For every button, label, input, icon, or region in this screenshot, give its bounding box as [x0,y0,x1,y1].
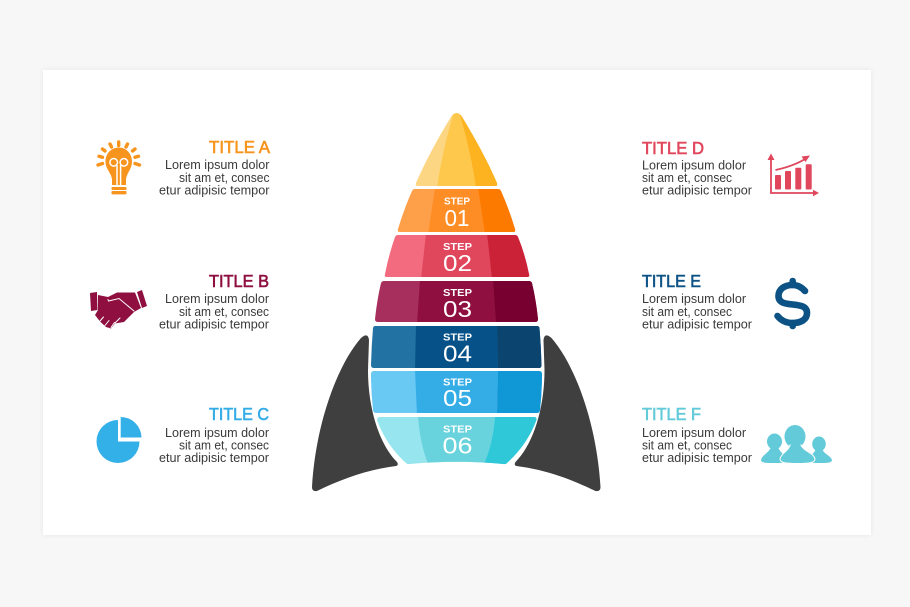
segment: step 04: STEP [443,332,472,344]
block: title D [642,138,753,198]
text: title A body [159,157,270,198]
text: title C body [159,425,270,465]
text: title F body: etur adipisic tempor [642,450,753,465]
block: title B [159,271,270,332]
text: title E body: etur adipisic tempor [642,316,753,332]
segment: step 05: 05 [443,385,472,411]
heading: title F: TITLE F [642,404,701,424]
text: title E body: Lorem ipsum dolor [642,291,747,306]
text: title E body: sit am et, consec [642,304,732,319]
icon: handshake [90,290,147,328]
nose cone [416,113,498,186]
block: title E [642,271,753,332]
left fin [312,335,398,491]
text: title B body: Lorem ipsum dolor [165,291,270,306]
text: title B body: sit am et, consec [179,304,269,319]
block: title C [159,404,270,465]
text: title E body [642,291,753,332]
heading: title C: TITLE C [209,404,269,424]
text: title F body: Lorem ipsum dolor [642,425,747,440]
segment: step 02: 02 [443,250,472,276]
text: title A body: Lorem ipsum dolor [165,157,270,172]
text: title D body: Lorem ipsum dolor [642,158,747,172]
heading: title A: TITLE A [209,137,270,157]
heading: title B: TITLE B [209,271,269,291]
segment: step 01: STEP [444,196,470,208]
text: title B body: etur adipisic tempor [159,316,270,332]
segment: step 02: STEP [443,242,472,253]
block: title A [159,137,270,198]
segment: step 05 [368,370,544,415]
segment: step 06: STEP [443,424,472,436]
text: title D body [642,158,753,198]
text: title A body: etur adipisic tempor [159,182,270,198]
segment: step 04: 04 [443,340,472,366]
text: title F body [642,425,753,465]
segment: step 03: STEP [443,288,472,299]
right fin [515,335,600,491]
block: title F [642,404,753,465]
segment: step 02 [382,234,532,279]
heading: title D: TITLE D [642,138,704,158]
text: title C body: etur adipisic tempor [159,450,270,465]
icon: light bulb [98,142,140,194]
segment: step 06 [375,416,540,466]
icon: bar chart with arrow [768,154,819,196]
text: title A body: sit am et, consec [179,170,270,185]
segment: step 01 [398,189,516,232]
panel: white card [43,70,871,535]
text: title F body: sit am et, consec [642,438,732,452]
segment: step 06: 06 [442,432,472,458]
heading: title E: TITLE E [642,271,701,291]
segment: step 05: STEP [443,378,472,388]
rocket [312,108,600,491]
segment: step 03: 03 [443,296,472,322]
icon: pie chart [96,417,142,463]
icon: group of people [761,425,832,464]
segment: step 03 [375,281,538,322]
segment: step 01: 01 [444,205,470,231]
text: title B body [159,291,270,332]
text: title D body: sit am et, consec [642,170,732,185]
text: title C body: Lorem ipsum dolor [165,425,270,440]
text: title C body: sit am et, consec [179,438,269,452]
segment: step 04 [368,325,544,370]
icon: dollar sign [778,281,807,326]
text: title D body: etur adipisic tempor [642,182,753,198]
